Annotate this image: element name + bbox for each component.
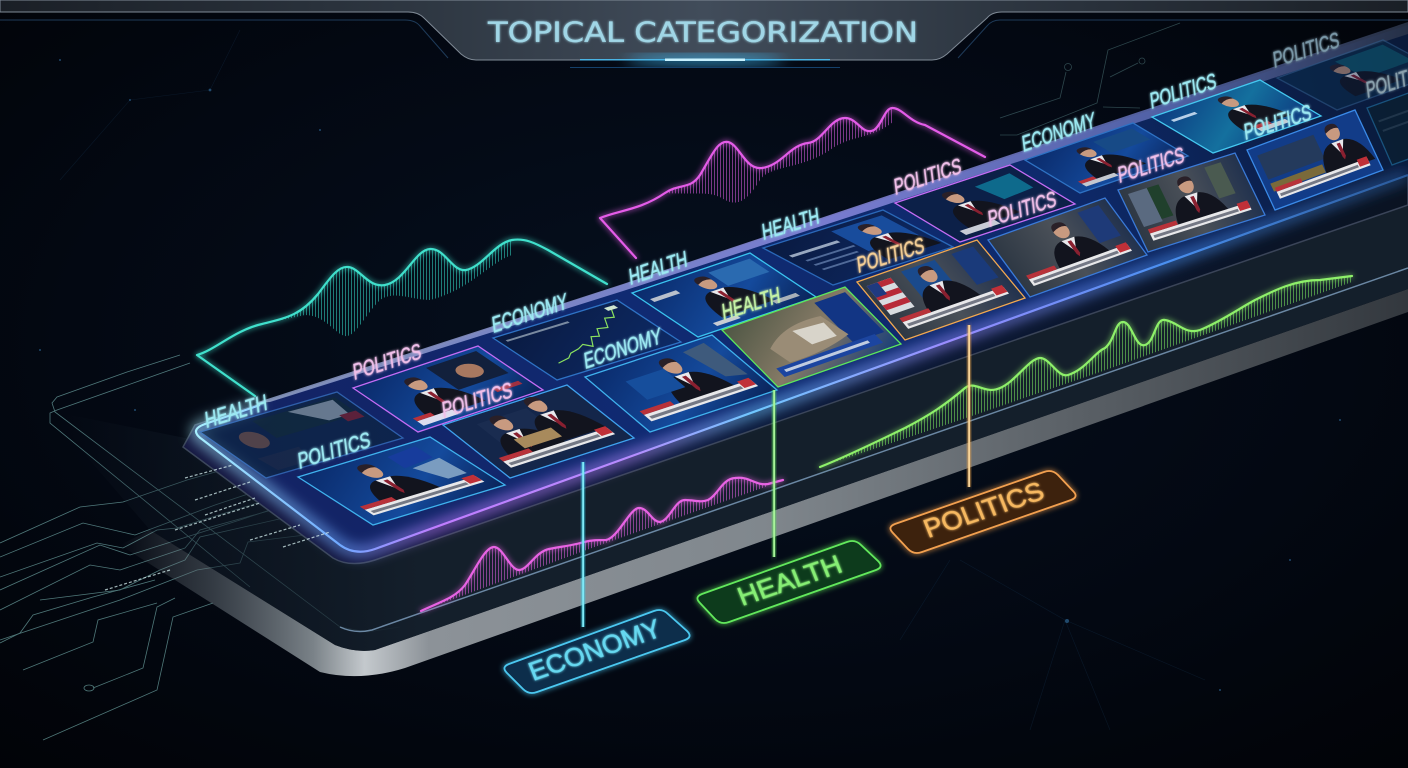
card: politics podium bbox=[1118, 153, 1265, 252]
mid plate bbox=[183, 30, 1408, 564]
card: politics blue anchor bbox=[298, 437, 505, 525]
label: politics: POLITICS bbox=[441, 378, 514, 423]
chart: teal health waveform bbox=[197, 240, 607, 396]
hairline plate layer bbox=[55, 150, 1408, 631]
circuit traces: top right bbox=[1000, 23, 1180, 135]
label: economy: ECONOMY bbox=[583, 322, 663, 374]
card: health faded bbox=[200, 392, 403, 478]
card: politics room bbox=[443, 385, 634, 478]
circuit traces: left bbox=[0, 355, 400, 740]
card: health blue bbox=[632, 253, 816, 337]
label: politics: POLITICS bbox=[297, 427, 372, 474]
label: health: HEALTH bbox=[721, 283, 782, 325]
title: TOPICAL CATEGORIZATION bbox=[487, 16, 918, 48]
connector: economy bbox=[581, 462, 585, 627]
label: economy: ECONOMY bbox=[1021, 107, 1097, 157]
card: economy anchor bbox=[1025, 123, 1188, 193]
chart: green waveform bbox=[820, 276, 1352, 467]
connector: politics bbox=[967, 325, 971, 487]
metal base plate bbox=[120, 289, 1408, 676]
card: dark far bbox=[1367, 72, 1408, 165]
card: politics crowd bbox=[1247, 110, 1383, 210]
label: politics: POLITICS bbox=[1243, 100, 1313, 145]
label: politics: POLITICS bbox=[987, 186, 1058, 232]
label: politics: POLITICS bbox=[893, 153, 963, 200]
card: economy anchor bbox=[585, 335, 777, 432]
glowing main panel bbox=[196, 25, 1408, 552]
card: politics purple bbox=[353, 346, 543, 432]
card: politics flag bbox=[857, 240, 1025, 340]
tag: economy bbox=[504, 610, 690, 693]
card: politics navy bbox=[895, 165, 1075, 242]
label: politics: POLITICS bbox=[1149, 68, 1218, 114]
label: politics: POLITICS bbox=[856, 233, 926, 278]
card: politics cyan bbox=[1152, 80, 1321, 153]
tag: health: HEALTH bbox=[734, 551, 846, 612]
label: economy: ECONOMY bbox=[491, 288, 569, 338]
card: economy chart bbox=[493, 300, 681, 380]
card labels bbox=[204, 27, 1408, 474]
card row: back bbox=[200, 40, 1408, 478]
chart: magenta politics waveform bbox=[600, 108, 985, 258]
label: politics: POLITICS bbox=[1117, 142, 1186, 188]
tag: politics: POLITICS bbox=[920, 477, 1048, 544]
label: health: HEALTH bbox=[761, 203, 821, 245]
dark plate layer bbox=[55, 268, 1408, 651]
card: politics far faded bbox=[1277, 40, 1408, 110]
card: politics flag 2 bbox=[988, 198, 1147, 297]
tag: economy: ECONOMY bbox=[525, 615, 665, 687]
chart: purple waveform bbox=[421, 478, 783, 611]
card row: front bbox=[298, 72, 1408, 525]
label: politics faded: POLITICS bbox=[1272, 27, 1341, 73]
header plate bbox=[0, 0, 1408, 68]
card: health faded blue bbox=[763, 210, 953, 285]
label: health: HEALTH bbox=[628, 245, 689, 290]
tag: health bbox=[697, 541, 881, 623]
tag: politics bbox=[890, 471, 1076, 553]
connector: health bbox=[772, 390, 776, 557]
hairline edge bbox=[340, 268, 1408, 631]
top rail strip bbox=[255, 22, 1408, 403]
card: health hands bbox=[722, 287, 901, 387]
data dashes bbox=[105, 465, 330, 590]
label: politics: POLITICS bbox=[352, 339, 423, 385]
label: health: HEALTH bbox=[204, 390, 269, 433]
